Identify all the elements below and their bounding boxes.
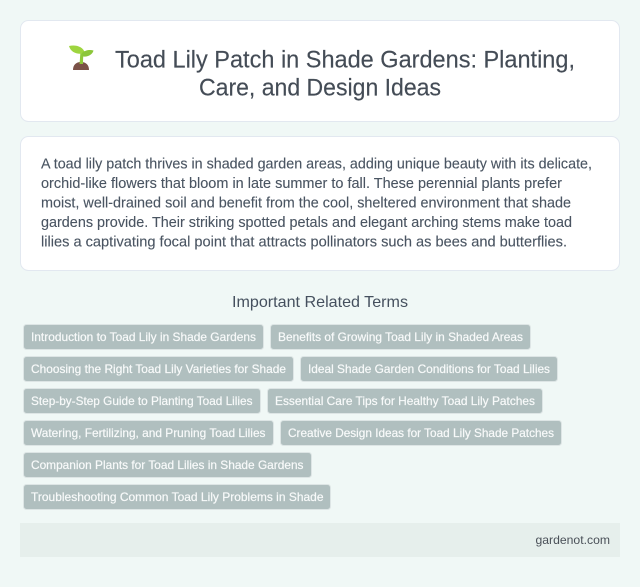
footer source: gardenot.com [536,533,610,547]
chip [270,324,530,350]
title: Care, and Design Ideas [199,74,441,102]
text block: description: orchid-like flowers that bloom in late summer to fall. These perennial plants prefer [41,176,562,192]
panel: description card [20,136,620,270]
text block: description [41,156,592,250]
chip: Ideal Shade Garden Conditions for Toad Lilies [308,362,550,376]
chip [24,452,312,478]
chip [24,484,330,510]
chip: Step-by-Step Guide to Planting Toad Lilies [31,394,252,408]
heading: related terms: Important Related Terms [232,294,408,311]
chip [24,324,264,350]
chip [24,356,294,382]
text block: description: A toad lily patch thrives in shaded garden areas, adding unique beauty with its delicate, [41,156,592,172]
chip [268,388,542,414]
title: Toad Lily Patch in Shade Gardens: Planting, [115,46,575,74]
chip: Choosing the Right Toad Lily Varieties for Shade [31,362,286,376]
chip: Troubleshooting Common Toad Lily Problems in Shade [31,490,324,504]
chip [24,420,274,446]
chip: Essential Care Tips for Healthy Toad Lily Patches [275,394,535,408]
chip: Creative Design Ideas for Toad Lily Shade Patches [288,426,554,440]
panel: title card [20,20,620,122]
chip: Companion Plants for Toad Lilies in Shade Gardens [31,458,304,472]
text block: description: moist, well-drained soil and benefit from the cool, sheltered environment that shade [41,195,571,211]
icon: seedling [69,45,94,70]
text block: description: lilies a captivating focal point that attracts pollinators such as bees and butterflies. [41,234,567,250]
chip: Watering, Fertilizing, and Pruning Toad Lilies [31,426,266,440]
footer [20,523,620,557]
chip [300,356,558,382]
text block: description: gardens provide. Their striking spotted petals and elegant arching stems make toad [41,215,572,231]
chip: Introduction to Toad Lily in Shade Gardens [31,330,256,344]
chip: Benefits of Growing Toad Lily in Shaded Areas [278,330,523,344]
chip [280,420,562,446]
title [115,46,575,102]
panel: related term chips [24,324,562,510]
chip [24,388,260,414]
